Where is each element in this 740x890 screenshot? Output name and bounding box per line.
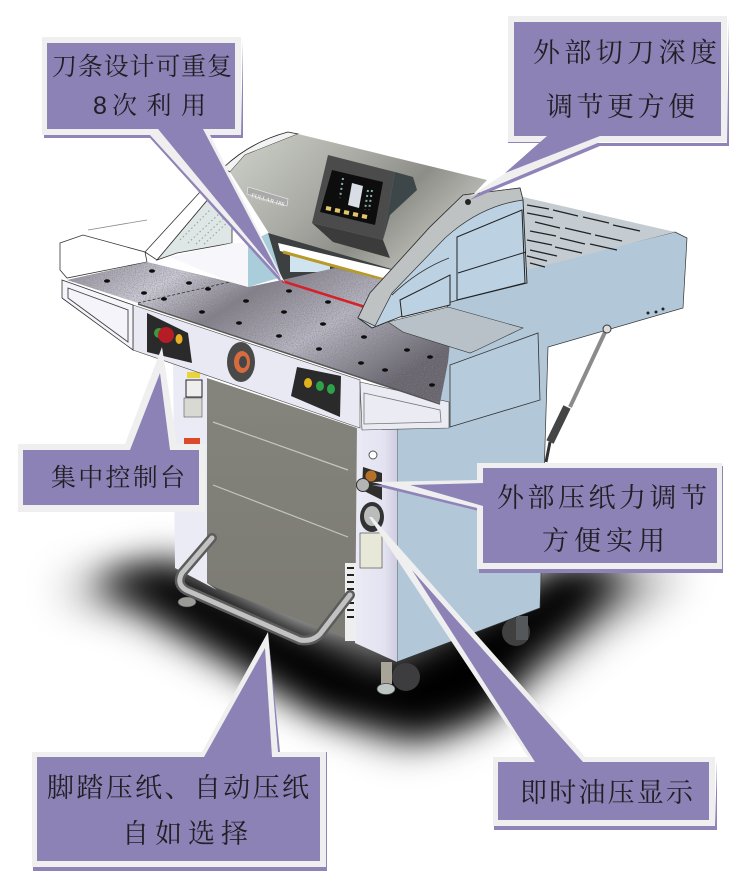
hood: FULLAR 18S: [250, 193, 285, 208]
callout text: 刀条设计可重复: [52, 53, 232, 81]
right under panel: [360, 382, 449, 430]
right wheel: [502, 616, 530, 646]
front right foot: [377, 662, 420, 694]
callout text: 集中控制台: [51, 464, 185, 492]
cutting opening: [268, 233, 395, 285]
control screen: [312, 155, 417, 258]
right side body: [397, 197, 687, 662]
left wing and guard: [60, 192, 282, 287]
callout: paper pressure adjust: [372, 463, 723, 573]
callout: cutter depth: [469, 16, 729, 200]
front fascia: [133, 305, 360, 428]
gas strut: [546, 325, 611, 462]
callout: foot pedal: [32, 632, 327, 871]
centre knob: [227, 342, 255, 382]
control console left: [147, 313, 192, 363]
left foot: [178, 597, 196, 607]
grey tray: [388, 307, 523, 353]
hood: [223, 132, 487, 272]
oil pressure gauge: [360, 502, 384, 532]
callout: control console: [18, 347, 205, 512]
right guard cover: [358, 188, 527, 328]
callout text: 外部切刀深度: [533, 38, 717, 68]
callout text: 即时油压显示: [520, 778, 694, 808]
callout text: 方便实用: [542, 526, 665, 556]
right end block: [450, 333, 540, 427]
callout: pressure display: [369, 517, 717, 830]
red cutting line: [282, 281, 365, 307]
callout text: 脚踏压纸、自动压纸: [47, 773, 309, 803]
callout text: [47, 773, 309, 849]
control console right: [291, 367, 341, 417]
left under panel: [62, 280, 133, 350]
grey door panel: [207, 378, 357, 642]
table top: [67, 262, 450, 404]
front right panel: [345, 425, 397, 662]
callout text: 外部压纸力调节: [497, 483, 707, 513]
left white column: [173, 360, 217, 590]
callout text: [533, 38, 717, 122]
callout text: [497, 483, 707, 556]
pressure adjust dial: [356, 467, 382, 500]
table holes: [104, 269, 435, 387]
foot pedal tube: [180, 538, 350, 640]
callout text: 次利用: [112, 92, 206, 120]
floor shadow: [55, 560, 685, 745]
machine illustration: [60, 132, 687, 694]
rating label: [360, 533, 382, 568]
callout text: 调节更方便: [546, 92, 695, 122]
callout text: [52, 53, 232, 120]
callout text: 8: [93, 92, 107, 120]
callout: knife bar: [42, 37, 285, 286]
callout text: 自如选择: [122, 819, 248, 849]
